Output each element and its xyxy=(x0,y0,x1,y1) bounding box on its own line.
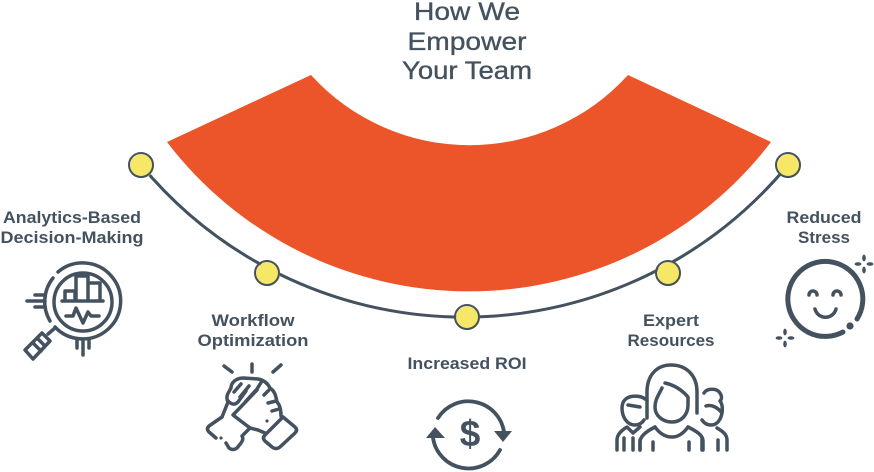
label: Analytics-Based Decision-Making: Decision-Making xyxy=(0,228,144,247)
title: Your Team xyxy=(402,57,532,85)
title xyxy=(402,0,532,85)
label: Increased ROI: Increased ROI xyxy=(408,354,526,373)
icon: clasped hands xyxy=(208,364,296,450)
label: Workflow Optimization: Optimization xyxy=(198,331,308,350)
label: Reduced Stress: Reduced xyxy=(786,208,862,227)
label: Expert Resources: Expert xyxy=(643,311,699,330)
label: Reduced Stress xyxy=(786,208,862,247)
icon: team of three people xyxy=(617,365,727,450)
label: Analytics-Based Decision-Making xyxy=(0,208,144,247)
label: Reduced Stress: Stress xyxy=(798,228,850,247)
icon: smiling face with sparkles xyxy=(776,255,873,347)
icon: dollar cycle arrows: $ xyxy=(460,413,481,454)
label: Expert Resources: Resources xyxy=(628,331,714,350)
label: Analytics-Based Decision-Making: Analytics-Based xyxy=(3,208,141,227)
orange arc segment xyxy=(167,75,771,291)
label: Workflow Optimization: Workflow xyxy=(212,311,295,330)
timeline markers xyxy=(129,153,801,330)
label: Workflow Optimization xyxy=(198,311,308,350)
label: Expert Resources xyxy=(628,311,714,350)
icon: dollar cycle arrows xyxy=(426,401,512,468)
timeline curve xyxy=(141,165,788,317)
title: Empower xyxy=(408,28,526,56)
icon: magnifier with chart xyxy=(25,263,121,359)
